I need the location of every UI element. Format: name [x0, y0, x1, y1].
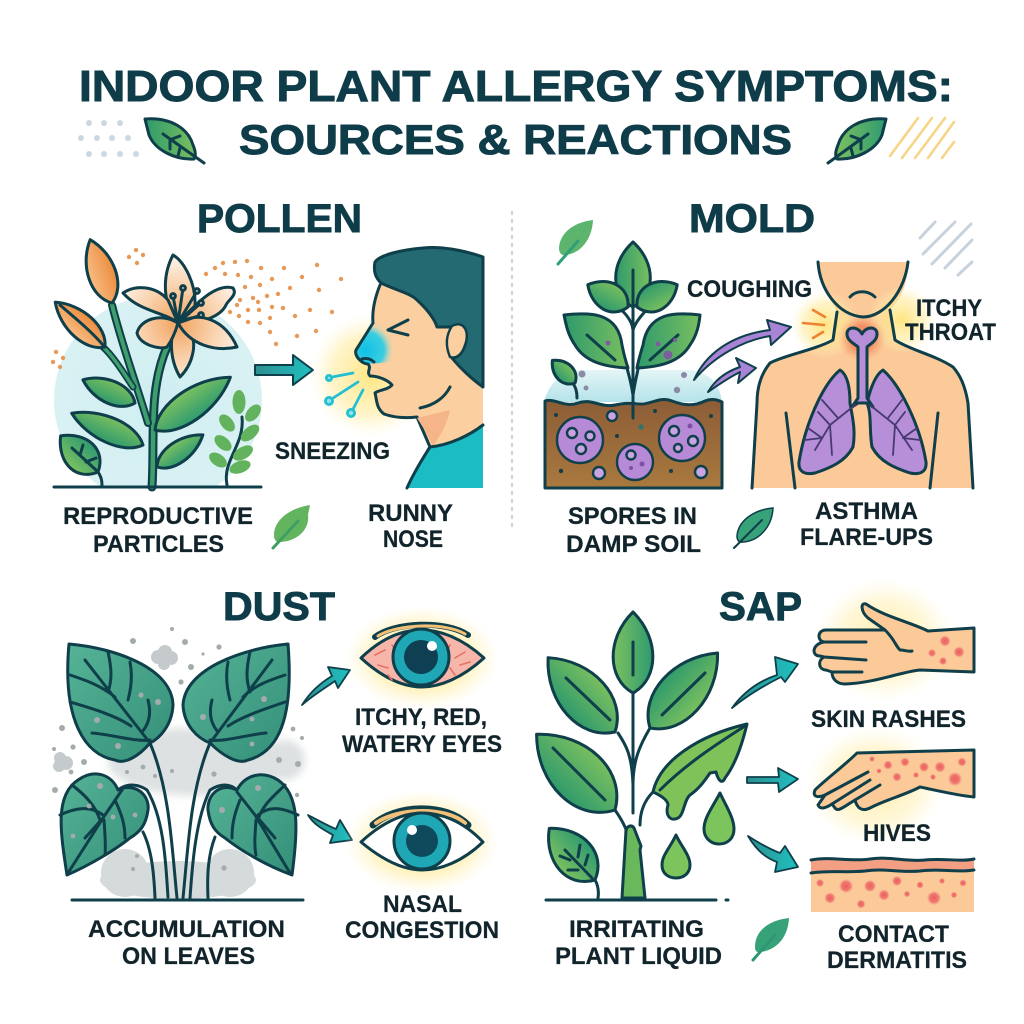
ground line [54, 486, 261, 488]
skin cross-section: contact dermatitis [811, 858, 974, 912]
label: nasal congestion [345, 891, 499, 944]
upper right leaf [183, 644, 289, 761]
lily plant [47, 235, 239, 487]
torso with neck and face [752, 262, 973, 488]
heading: dust: DUST [223, 585, 335, 629]
label: sneezing: SNEEZING [275, 438, 390, 465]
label: hives: HIVES [863, 820, 931, 847]
label: reproductive particles [63, 503, 253, 558]
hand: hives [814, 750, 974, 810]
dust specks [52, 627, 304, 871]
label: runny nose: NOSE [383, 526, 443, 553]
heading: mold: MOLD [689, 197, 815, 241]
hair [374, 247, 483, 387]
label: runny nose: RUNNY [368, 500, 453, 527]
icon: leaf [753, 918, 789, 960]
title: INDOOR PLANT ALLERGY SYMPTOMS: [79, 62, 953, 111]
label: reproductive particles: REPRODUCTIVE [63, 503, 253, 530]
icon: leaf [273, 505, 310, 548]
label: contact dermatitis: CONTACT [838, 921, 949, 948]
arrows: sap to skin [732, 657, 798, 872]
lower left leaf [60, 774, 148, 875]
sap plant [518, 612, 747, 898]
pale blue dome [54, 300, 262, 486]
upper left leaf [68, 644, 173, 761]
dust plant stems [118, 743, 237, 898]
small fern [206, 390, 264, 485]
spores in soil [557, 411, 707, 480]
label: nasal congestion: NASAL [383, 891, 462, 918]
stamens [171, 286, 203, 323]
sneeze droplets [325, 373, 363, 417]
title [79, 62, 953, 163]
label: itchy throat: ITCHY [916, 295, 982, 322]
label: irritating plant liquid [555, 916, 722, 970]
person sneezing [355, 247, 483, 488]
label: accumulation on leaves [88, 916, 285, 970]
lungs [799, 328, 926, 474]
panel: sap [518, 578, 974, 974]
decoration: yellow hatch [890, 118, 954, 158]
panel: pollen [47, 197, 483, 558]
ground line [72, 898, 303, 902]
yellow glow [310, 313, 434, 437]
label: itchy red watery eyes: WATERY EYES [342, 731, 502, 758]
divider [511, 212, 513, 532]
icon: red itchy eye [361, 625, 484, 687]
dust clouds [108, 728, 305, 796]
icon: leaf [734, 508, 773, 548]
label: itchy red watery eyes: ITCHY, RED, [355, 704, 487, 731]
glow behind eyes [344, 606, 500, 894]
sap drops [662, 793, 734, 878]
label: itchy red watery eyes [342, 704, 502, 758]
label: accumulation on leaves: ON LEAVES [122, 943, 255, 970]
heading: pollen: POLLEN [197, 197, 362, 241]
arrow: to lower eye [308, 815, 352, 843]
label: irritating plant liquid: IRRITATING [569, 916, 704, 943]
label: asthma flare-ups: FLARE-UPS [800, 524, 933, 551]
label: spores in damp soil: SPORES IN [568, 503, 697, 530]
arrows: spores to body [694, 320, 791, 392]
decoration: grey dots [78, 120, 139, 157]
heading: sap: SAP [719, 585, 802, 629]
lily flower [123, 255, 237, 377]
icon: normal eye [361, 809, 483, 870]
label: reproductive particles: PARTICLES [93, 531, 224, 558]
arrow: pollen to sneeze [255, 355, 313, 385]
label: nasal congestion: CONGESTION [345, 917, 499, 944]
label: skin rashes: SKIN RASHES [811, 706, 966, 733]
soil block [545, 399, 722, 488]
label: coughing: COUGHING [687, 276, 812, 303]
ground line [546, 898, 728, 902]
pollen dots [51, 248, 343, 369]
label: itchy throat: THROAT [905, 319, 996, 346]
soil specks [554, 409, 713, 473]
yellow glow at throat [791, 286, 936, 362]
icon: title leaf right [828, 119, 886, 163]
title: SOURCES & REACTIONS [239, 116, 792, 163]
label: spores in damp soil [566, 503, 701, 558]
icon: title leaf left [145, 119, 204, 163]
label: itchy throat [905, 295, 996, 346]
irritation marks [803, 310, 825, 338]
icon: leaf [558, 220, 593, 264]
decoration: hatch [920, 222, 972, 275]
floating spores [578, 370, 687, 393]
label: asthma flare-ups: ASTHMA [815, 498, 918, 525]
glow behind hands [805, 578, 955, 845]
label: asthma flare-ups [800, 498, 933, 551]
label: spores in damp soil: DAMP SOIL [566, 531, 701, 558]
label: irritating plant liquid: PLANT LIQUID [555, 943, 722, 970]
label: runny nose [368, 500, 453, 553]
lower right leaf [208, 775, 298, 875]
label: accumulation on leaves: ACCUMULATION [88, 916, 285, 943]
label: contact dermatitis [827, 921, 967, 974]
torso outline [752, 262, 973, 488]
panel: dust [52, 585, 502, 970]
shirt [407, 425, 483, 488]
arrow: to red eye [302, 667, 350, 705]
label: contact dermatitis: DERMATITIS [827, 947, 967, 974]
cut stem [622, 826, 645, 898]
soil mist [544, 370, 722, 402]
mold plant [546, 242, 700, 420]
hand: skin rashes [814, 604, 974, 684]
panel: mold [544, 197, 996, 558]
